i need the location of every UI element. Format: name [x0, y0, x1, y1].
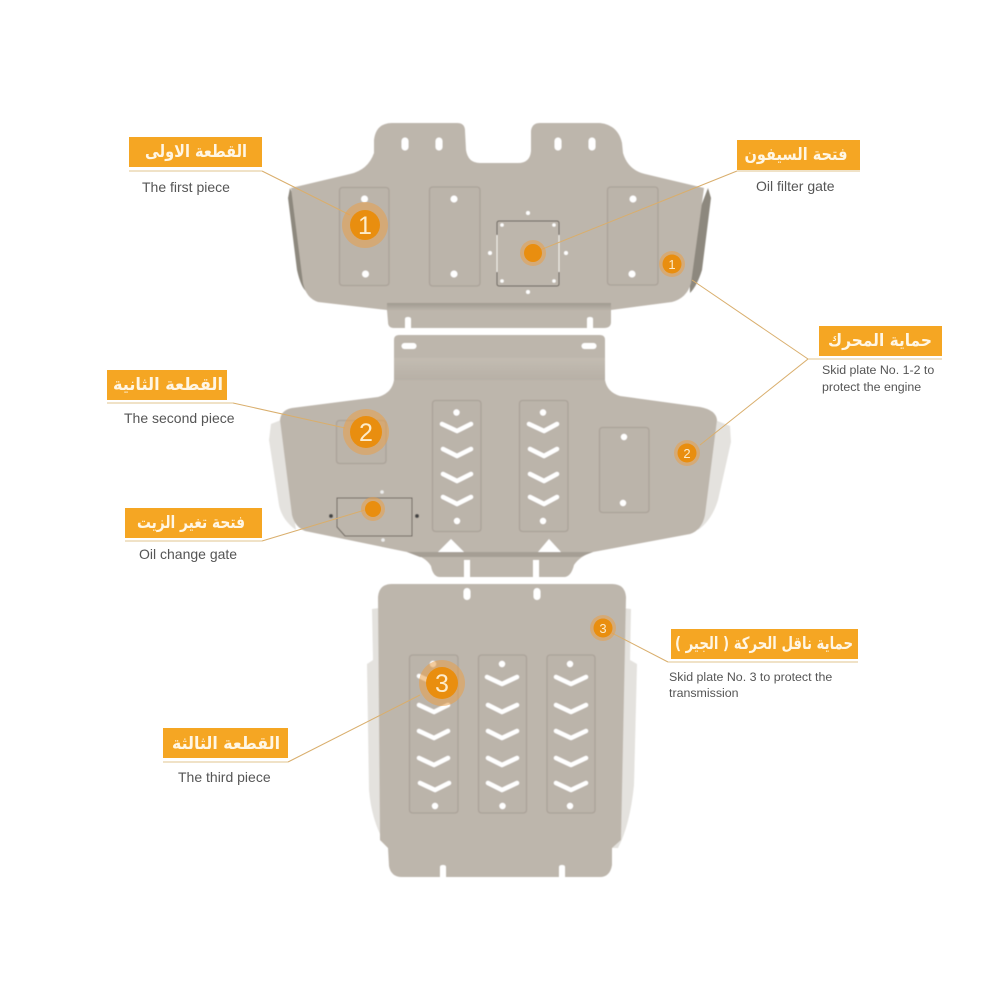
plate 1: engine skid plate, first piece [288, 123, 711, 328]
plate 3: transmission skid plate, third piece [367, 584, 637, 877]
marker: small 1: 1 [668, 257, 676, 272]
callout: the third piece: The third piece [178, 769, 271, 785]
callout: the first piece: The first piece [142, 179, 230, 195]
callout: the second piece [107, 370, 235, 426]
marker: small 2: 2 [683, 446, 691, 461]
marker: oil filter gate [520, 240, 546, 266]
marker: small 3: 3 [599, 621, 607, 636]
callout: the first piece: القطعة الاولى [145, 142, 247, 162]
callout: engine protection: protect the engine [822, 380, 921, 394]
marker: large 1: 1 [358, 212, 372, 240]
callout: the third piece [163, 728, 288, 785]
marker: small 2 [674, 440, 700, 466]
marker: small 1 [659, 251, 685, 277]
callout: the third piece: القطعة الثالثة [172, 734, 280, 754]
callout: the first piece [129, 137, 262, 195]
marker: oil change gate [361, 497, 385, 521]
callout: engine protection: حماية المحرك [828, 331, 932, 351]
callout: transmission protection [668, 629, 858, 700]
callout: transmission protection: transmission [669, 686, 739, 700]
callout: oil change gate: Oil change gate [139, 546, 237, 562]
plate 2: engine skid plate, second piece [269, 335, 731, 577]
marker: large 2: 2 [359, 419, 373, 447]
marker: small 3 [590, 615, 616, 641]
leader lines [233, 171, 808, 762]
callout: oil filter gate: Oil filter gate [756, 178, 835, 194]
callout: transmission protection: Skid plate No. 3 to protect the [669, 670, 832, 684]
callout: engine protection: Skid plate No. 1-2 to [822, 363, 934, 377]
callout: the second piece: The second piece [124, 410, 235, 426]
callout: oil change gate: فتحة تغير الزيت [137, 513, 245, 533]
callout: transmission protection: حماية ناقل الحركة ( الجير ) [675, 634, 853, 654]
callout: oil filter gate [737, 140, 860, 194]
callout: oil change gate [125, 508, 262, 562]
callout: the second piece: القطعة الثانية [113, 375, 223, 395]
marker: large 2 [343, 409, 389, 455]
callout: engine protection [808, 326, 942, 394]
marker: large 3 [419, 660, 465, 706]
marker: large 3: 3 [435, 670, 449, 698]
callout: oil filter gate: فتحة السيفون [744, 145, 848, 165]
marker: large 1 [342, 202, 388, 248]
